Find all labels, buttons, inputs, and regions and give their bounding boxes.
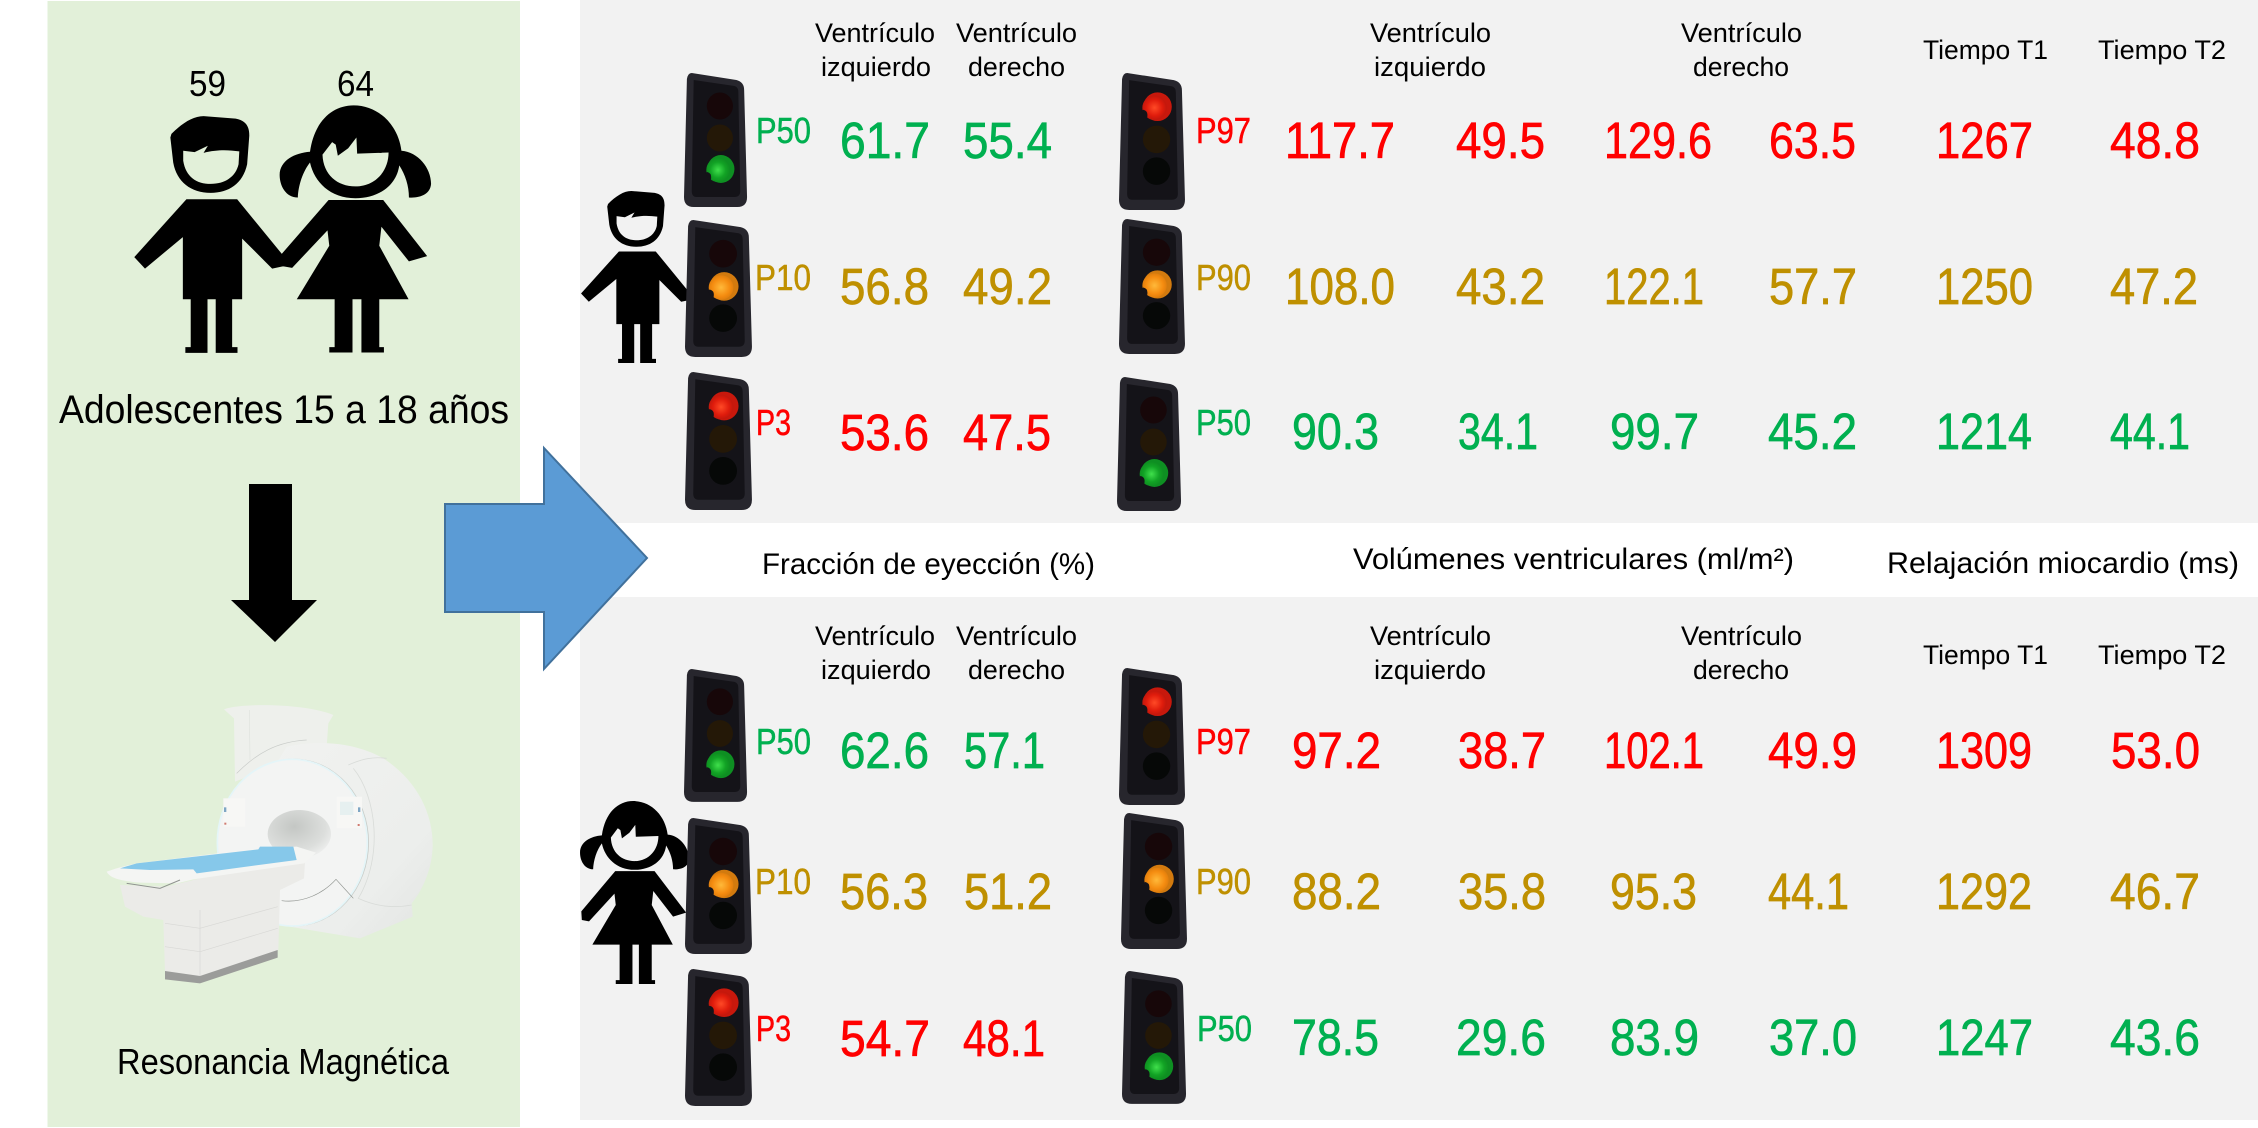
boys row 2: amber values: 47.2	[2110, 258, 2198, 315]
girls row 3: low and green values: P50	[1197, 1008, 1252, 1049]
traffic light: girls P50 volumes	[1122, 971, 1186, 1104]
girls row 1: red and green values: 102.1	[1604, 722, 1704, 779]
column headers: girls: izquierdo	[821, 655, 931, 685]
boys row 3: low and green values	[756, 402, 2190, 461]
boys row 2: amber values: 1250	[1936, 258, 2033, 315]
panel: girls results background	[580, 597, 2258, 1120]
boys row 1: red and green values: 48.8	[2110, 112, 2200, 169]
traffic light: girls P97	[1119, 668, 1185, 805]
girls row 2: amber values: P90	[1196, 861, 1251, 902]
girls row 1: red and green values: 62.6	[840, 722, 929, 779]
boys row 1: red and green values: P50	[756, 110, 811, 151]
girls row 3: low and green values: 29.6	[1456, 1009, 1546, 1066]
boys row 1: red and green values: 63.5	[1769, 112, 1856, 169]
boys row 3: low and green values: 47.5	[963, 404, 1051, 461]
traffic lights: girls, ejection fraction	[684, 669, 752, 1106]
boys row 3: low and green values: 99.7	[1610, 403, 1699, 460]
label: number of girls: 64	[337, 63, 374, 104]
girls row 3: low and green values: 43.6	[2110, 1009, 2200, 1066]
panel: boys results background	[580, 0, 2258, 523]
boys row 2: amber values: 56.8	[840, 258, 929, 315]
girls row 1: red and green values: 49.9	[1768, 722, 1857, 779]
column headers: girls: derecho	[968, 655, 1065, 685]
girls row 3: low and green values: 78.5	[1292, 1009, 1379, 1066]
icon: boy and girl holding hands	[134, 105, 431, 353]
boys row 3: low and green values: 45.2	[1768, 403, 1857, 460]
traffic light: boys P50 volumes	[1117, 377, 1181, 511]
column headers: girls	[815, 621, 2226, 685]
boys row 3: low and green values: 90.3	[1292, 403, 1379, 460]
girls row 1: red and green values: P50	[756, 721, 811, 762]
column headers: boys: derecho	[968, 52, 1065, 82]
girls row 2: amber values: 35.8	[1458, 863, 1546, 920]
girls row 1: red and green values	[756, 721, 2200, 779]
boys row 3: low and green values: 53.6	[840, 404, 929, 461]
text: MRI caption: Resonancia Magnética	[117, 1041, 450, 1082]
column headers: boys: Tiempo T1	[1923, 35, 2048, 65]
traffic light: girls P10	[685, 818, 752, 954]
girls row 2: amber values: 1292	[1936, 863, 2032, 920]
column headers: girls: derecho	[1693, 655, 1789, 685]
column headers: boys: Ventrículo	[815, 18, 935, 48]
column headers: boys: Ventrículo	[1370, 18, 1491, 48]
boys row 3: low and green values: 44.1	[2110, 403, 2190, 460]
girls row 2: amber values: 88.2	[1292, 863, 1381, 920]
girls row 2: amber values	[755, 861, 2200, 920]
boys row 2: amber values: 43.2	[1456, 258, 1545, 315]
boys row 2: amber values: 108.0	[1285, 258, 1395, 315]
girls row 1: red and green values: 1309	[1936, 722, 2032, 779]
traffic light: girls P3	[685, 969, 752, 1106]
panel: study population and method	[48, 1, 520, 1127]
column headers: boys: Tiempo T2	[2098, 35, 2226, 65]
boys row 1: red and green values: 129.6	[1604, 112, 1712, 169]
boys row 1: red and green values: 1267	[1936, 112, 2033, 169]
boys row 3: low and green values: 34.1	[1458, 403, 1538, 460]
boys row 3: low and green values: P3	[756, 402, 791, 443]
icon: small boy	[581, 191, 690, 363]
boys row 1: red and green values: P97	[1196, 110, 1251, 151]
traffic light: girls P90	[1121, 813, 1187, 949]
girls row 3: low and green values: 83.9	[1610, 1009, 1699, 1066]
girls row 2: amber values: 44.1	[1768, 863, 1849, 920]
traffic light: boys P50	[684, 73, 747, 207]
girls row 2: amber values: 46.7	[2110, 863, 2200, 920]
heading: myocardial relaxation: Relajación miocardio (ms)	[1887, 547, 2239, 580]
boys row 3: low and green values: 1214	[1936, 403, 2032, 460]
boys row 1: red and green values	[756, 110, 2200, 169]
girls row 3: low and green values: 54.7	[840, 1010, 930, 1067]
girls row 1: red and green values: 53.0	[2111, 722, 2200, 779]
boys row 2: amber values: 49.2	[963, 258, 1052, 315]
column headers: girls: izquierdo	[1374, 655, 1486, 685]
girls row 3: low and green values	[756, 1008, 2200, 1067]
arrow: blue arrow to results	[445, 448, 647, 669]
column headers: boys: Ventrículo	[956, 18, 1077, 48]
column headers: girls: Ventrículo	[956, 621, 1077, 651]
girls row 2: amber values: 51.2	[964, 863, 1052, 920]
boys row 1: red and green values: 55.4	[963, 112, 1052, 169]
column headers: girls: Ventrículo	[1681, 621, 1802, 651]
column headers: boys: izquierdo	[821, 52, 931, 82]
traffic light: girls P50	[684, 669, 747, 802]
column headers: girls: Tiempo T2	[2098, 640, 2226, 670]
traffic lights: girls, volumes	[1119, 668, 1187, 1104]
girls row 3: low and green values: 37.0	[1769, 1009, 1857, 1066]
column headers: boys: derecho	[1693, 52, 1789, 82]
boys row 1: red and green values: 49.5	[1456, 112, 1545, 169]
arrow: black downward	[231, 484, 317, 642]
girls row 3: low and green values: 1247	[1936, 1009, 2033, 1066]
boys row 2: amber values: P10	[755, 257, 811, 298]
boys row 2: amber values	[755, 257, 2198, 315]
girls row 2: amber values: 56.3	[840, 863, 928, 920]
heading: ventricular volumes: Volúmenes ventriculares (ml/m²)	[1353, 543, 1794, 576]
label: number of boys: 59	[189, 63, 226, 104]
icon: small girl	[580, 801, 689, 984]
text: age range: Adolescentes 15 a 18 años	[59, 388, 509, 432]
boys row 2: amber values: P90	[1196, 257, 1251, 298]
column headers: boys: Ventrículo	[1681, 18, 1802, 48]
boys row 2: amber values: 122.1	[1604, 258, 1704, 315]
boys row 1: red and green values: 61.7	[840, 112, 930, 169]
heading: ejection fraction: Fracción de eyección (%)	[762, 548, 1095, 581]
column headers: girls: Tiempo T1	[1923, 640, 2048, 670]
boys row 1: red and green values: 117.7	[1285, 112, 1395, 169]
traffic light: boys P3	[685, 372, 752, 510]
girls row 1: red and green values: 38.7	[1458, 722, 1546, 779]
icon: MRI scanner	[107, 705, 433, 983]
girls row 3: low and green values: P3	[756, 1008, 791, 1049]
column headers: girls: Ventrículo	[1370, 621, 1491, 651]
girls row 1: red and green values: 97.2	[1292, 722, 1381, 779]
girls row 3: low and green values: 48.1	[963, 1010, 1045, 1067]
traffic lights: boys, ejection fraction	[684, 73, 752, 510]
column headers: boys: izquierdo	[1374, 52, 1486, 82]
column headers: boys	[815, 18, 2226, 82]
column headers: girls: Ventrículo	[815, 621, 935, 651]
traffic light: boys P10	[685, 220, 752, 357]
girls row 1: red and green values: P97	[1196, 721, 1251, 762]
traffic lights: boys, volumes	[1117, 73, 1185, 511]
girls row 1: red and green values: 57.1	[964, 722, 1045, 779]
girls row 2: amber values: P10	[755, 861, 811, 902]
boys row 2: amber values: 57.7	[1769, 258, 1857, 315]
girls row 2: amber values: 95.3	[1610, 863, 1697, 920]
traffic light: boys P90	[1119, 219, 1185, 354]
traffic light: boys P97	[1119, 73, 1185, 210]
boys row 3: low and green values: P50	[1196, 402, 1251, 443]
